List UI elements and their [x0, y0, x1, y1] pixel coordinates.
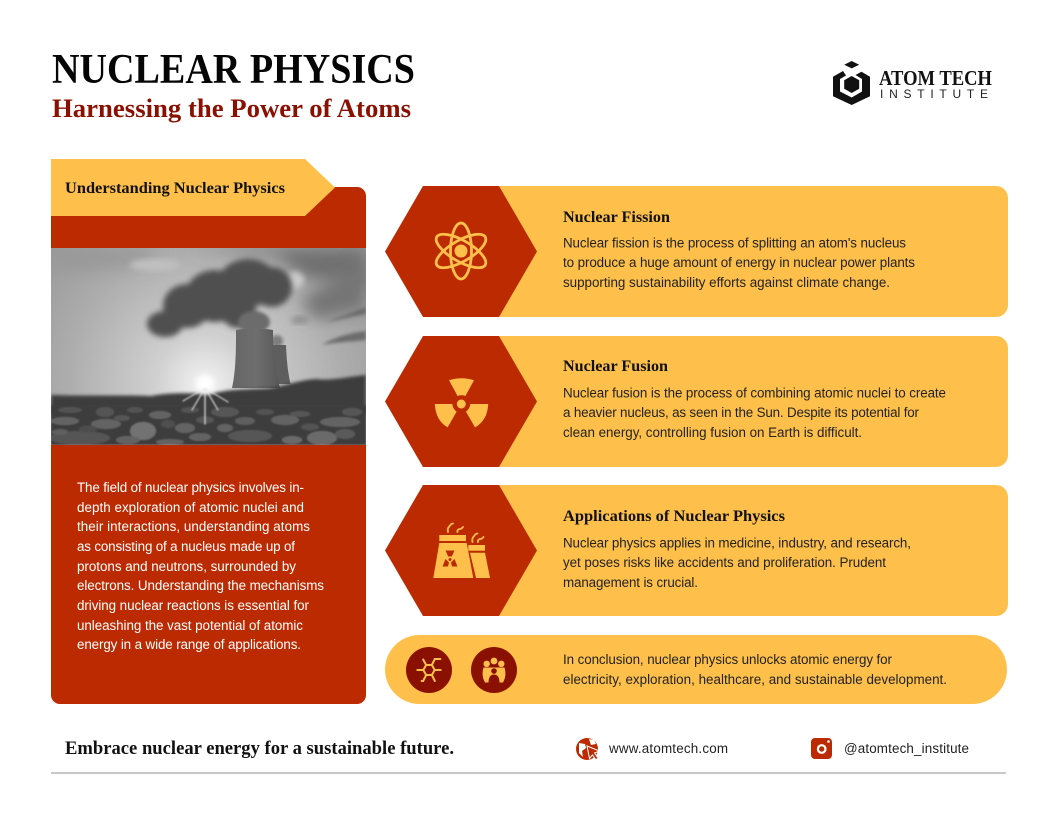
logo: Atom Tech Institute: INSTITUTE: [880, 87, 988, 101]
icon: radiation: [435, 378, 488, 427]
heading: Nuclear Fusion: [563, 358, 668, 375]
sun: [196, 375, 214, 393]
tower 2: [273, 345, 290, 384]
icon: instagram: [811, 738, 832, 759]
tower 1: [232, 328, 280, 388]
hexagon: [385, 186, 537, 317]
body text: a heavier nucleus, as seen in the Sun. Despite its potential for: [563, 405, 920, 420]
body text: management is crucial.: [563, 575, 698, 590]
icon: atom: [432, 223, 490, 279]
icon: nuclear power plant: [433, 524, 490, 578]
panel text: driving nuclear reactions is essential for: [77, 598, 310, 613]
card: applications of nuclear physics: [385, 485, 1008, 616]
card: nuclear fission: [385, 186, 1008, 317]
panel text: [77, 480, 324, 652]
conclusion pill: [385, 635, 1007, 704]
conclusion text: [563, 652, 947, 687]
rocky ground: [50, 405, 366, 445]
body text: [563, 236, 915, 290]
card: nuclear fusion: [385, 336, 1008, 467]
body text: [563, 536, 911, 590]
panel: understanding nuclear physics: [50, 187, 366, 704]
panel text: as consisting of a nucleus made up of: [77, 539, 295, 554]
panel text: their interactions, understanding atoms: [77, 519, 310, 534]
subtitle: Harnessing the Power of Atoms: [52, 94, 411, 123]
hexagon: [385, 336, 537, 467]
logo: Atom Tech Institute: [833, 61, 992, 105]
logo: Atom Tech Institute: ATOM TECH: [879, 66, 992, 90]
tag: understanding nuclear physics: Understanding Nuclear Physics: [65, 180, 285, 197]
call to action: Embrace nuclear energy for a sustainable future.: [65, 739, 454, 759]
body text: Nuclear fusion is the process of combining atomic nuclei to create: [563, 386, 946, 400]
hexagon: [385, 485, 537, 616]
body text: supporting sustainability efforts against climate change.: [563, 275, 890, 290]
body text: yet poses risks like accidents and proliferation. Prudent: [563, 555, 886, 570]
heading: Nuclear Fission: [563, 209, 670, 226]
conclusion text: electricity, exploration, healthcare, and sustainable development.: [563, 672, 947, 687]
panel text: The field of nuclear physics involves in-: [77, 480, 304, 495]
body text: [563, 386, 946, 440]
body text: to produce a huge amount of energy in nuclear power plants: [563, 255, 915, 270]
icon: people: [471, 647, 517, 693]
icon: molecule: [406, 647, 452, 693]
treeline: [51, 375, 366, 415]
body text: Nuclear fission is the process of splitting an atom's nucleus: [563, 236, 906, 250]
sunburst: [183, 388, 228, 424]
icon: website globe: [576, 738, 600, 760]
instagram handle: @atomtech_institute: [844, 741, 969, 756]
heading: Applications of Nuclear Physics: [563, 508, 785, 525]
smoke cloud: [147, 259, 292, 337]
panel text: energy in a wide range of applications.: [77, 637, 301, 652]
body text: Nuclear physics applies in medicine, industry, and research,: [563, 536, 911, 550]
tag: understanding nuclear physics: [51, 159, 335, 216]
photo: cooling towers at sunset: [50, 248, 366, 445]
panel text: unleashing the vast potential of atomic: [77, 618, 303, 633]
panel text: electrons. Understanding the mechanisms: [77, 578, 324, 593]
body text: clean energy, controlling fusion on Earth is difficult.: [563, 425, 862, 440]
conclusion text: In conclusion, nuclear physics unlocks atomic energy for: [563, 652, 893, 667]
title: NUCLEAR PHYSICS: [52, 47, 415, 93]
website: www.atomtech.com: [608, 741, 728, 756]
panel text: protons and neutrons, surrounded by: [77, 559, 296, 574]
panel text: depth exploration of atomic nuclei and: [77, 500, 304, 515]
